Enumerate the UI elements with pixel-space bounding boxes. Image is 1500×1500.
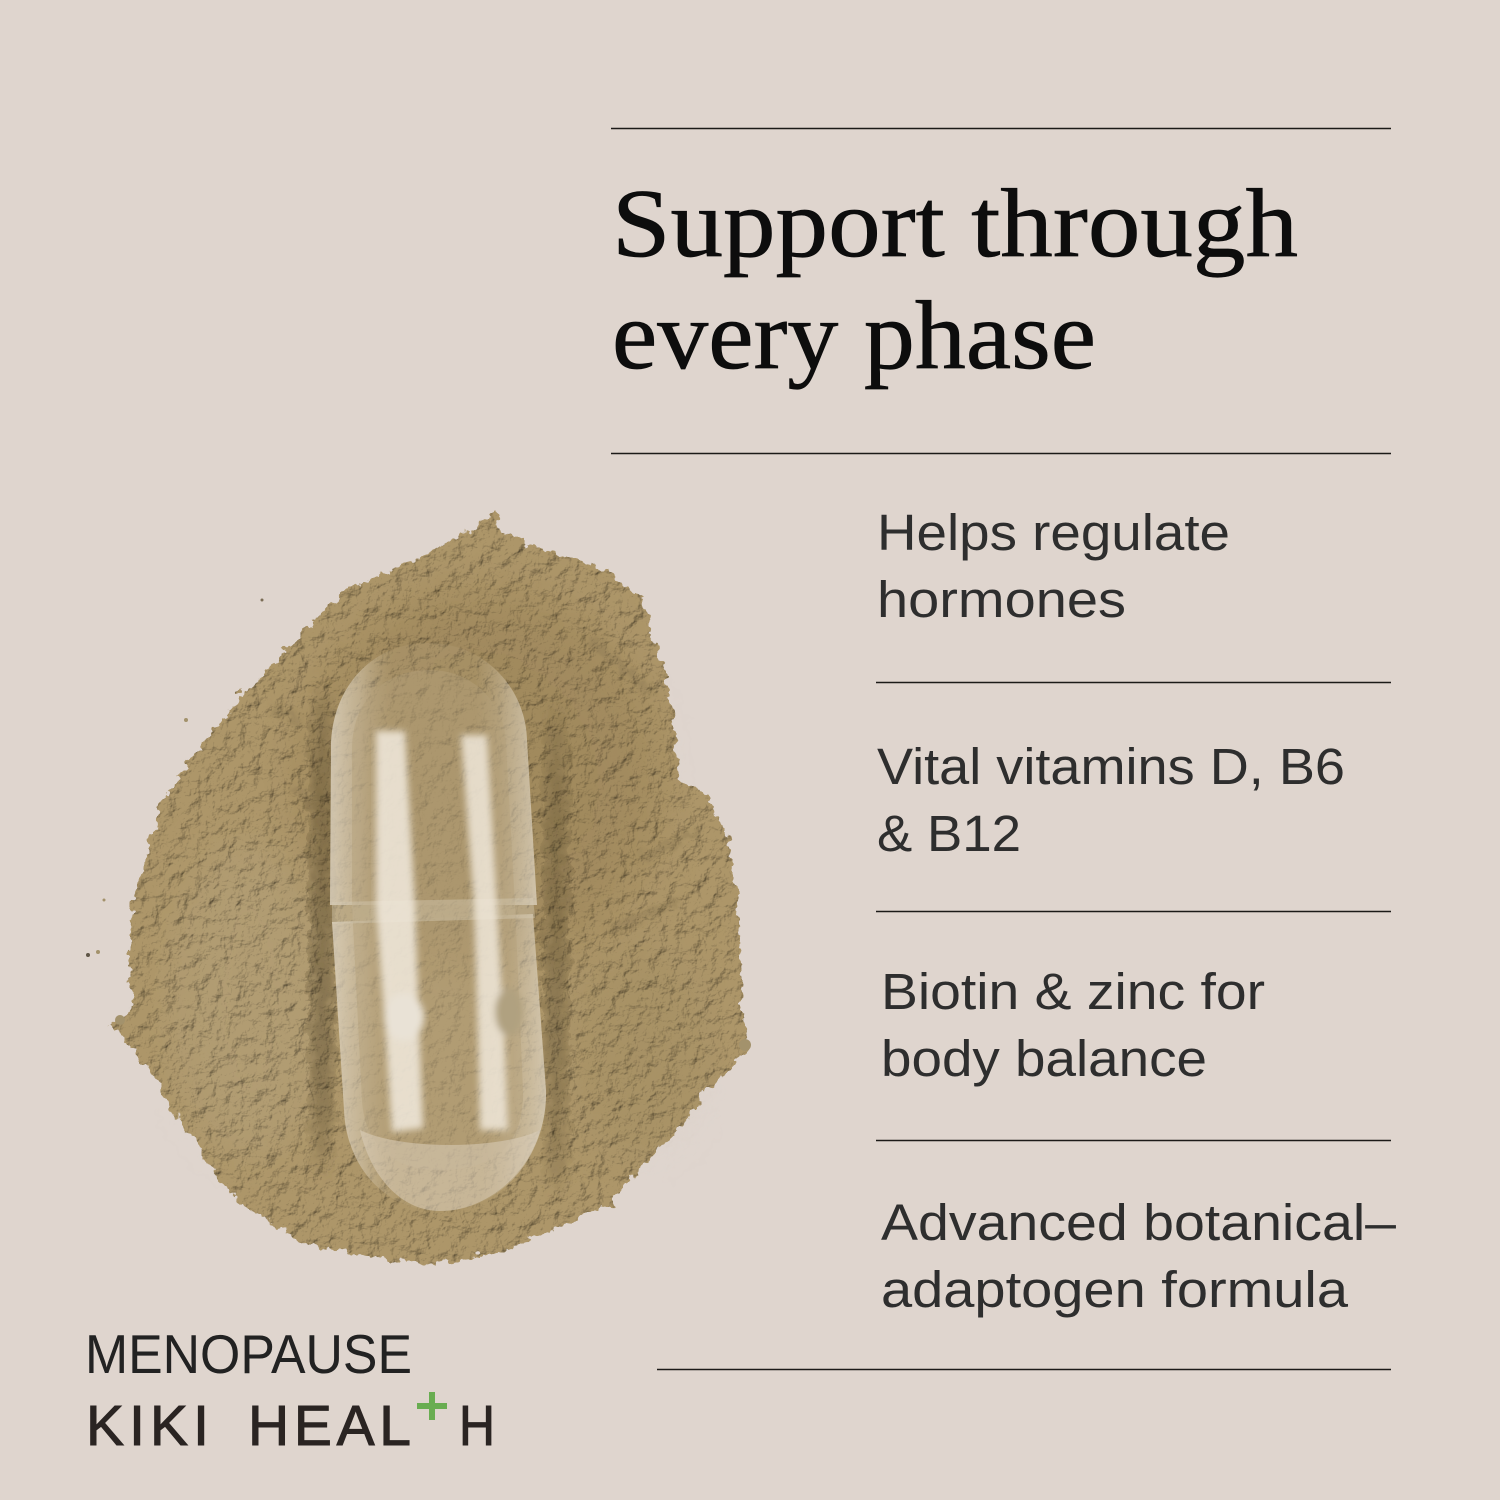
capsule upper shell bbox=[330, 643, 537, 905]
loose specks bbox=[86, 598, 751, 1051]
panel: top heading rule bbox=[611, 128, 1391, 130]
text block: benefit 4 bbox=[881, 1194, 1397, 1318]
benefit rule 3 bbox=[876, 1140, 1391, 1142]
powder pile bbox=[110, 512, 752, 1264]
benefit rule 2 bbox=[876, 910, 1391, 912]
text block: benefit 4: Advanced botanical– bbox=[881, 1194, 1397, 1251]
logo: Kiki Health: HEAL bbox=[248, 1394, 411, 1458]
capsule bottom glow bbox=[360, 1130, 540, 1211]
title bbox=[612, 170, 1298, 390]
logo: Kiki Health bbox=[86, 1392, 495, 1458]
heading bottom rule bbox=[611, 452, 1391, 454]
highlight left bbox=[376, 731, 424, 1132]
text block: benefit 3: Biotin & zinc for bbox=[881, 963, 1265, 1020]
capsule seam band bbox=[332, 898, 535, 924]
benefit rule 1 bbox=[876, 682, 1391, 684]
text block: benefit 4: adaptogen formula bbox=[881, 1261, 1349, 1318]
text block: benefit 2 bbox=[877, 738, 1345, 862]
highlight right bbox=[461, 735, 523, 1130]
logo: Kiki Health: KIKI bbox=[86, 1394, 209, 1458]
text block: benefit 2: Vital vitamins D, B6 bbox=[877, 738, 1345, 795]
benefit rule 4 bbox=[657, 1368, 1391, 1370]
text block: benefit 2: & B12 bbox=[877, 805, 1021, 862]
capsule inner tint bbox=[352, 670, 523, 1170]
text block: benefit 3: body balance bbox=[881, 1030, 1207, 1087]
text block: benefit 1: hormones bbox=[877, 571, 1126, 628]
illustration: powder pile with capsule bbox=[86, 512, 752, 1264]
text block: benefit 1 bbox=[877, 504, 1230, 628]
label: product name: MENOPAUSE bbox=[85, 1323, 412, 1385]
capsule lower shell bbox=[332, 914, 546, 1211]
text block: benefit 3 bbox=[881, 963, 1265, 1087]
text block: benefit 1: Helps regulate bbox=[877, 504, 1230, 561]
logo: Kiki Health: H bbox=[459, 1394, 495, 1458]
icon: green plus as T bbox=[417, 1392, 447, 1420]
title: every phase bbox=[612, 282, 1096, 390]
capsule bbox=[330, 643, 546, 1211]
title: Support through bbox=[612, 170, 1298, 278]
